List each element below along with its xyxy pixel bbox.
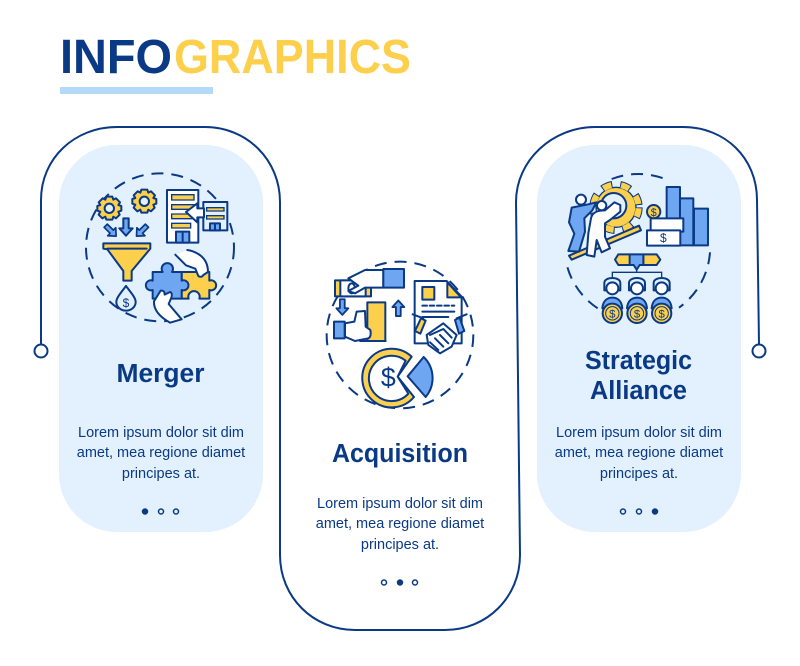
text block: acquisition: Lorem ipsum dolor sit dim xyxy=(317,496,483,512)
text block: merger: amet, mea regione diamet xyxy=(77,445,245,461)
title: GRAPHICS xyxy=(174,31,411,84)
pagination dots: merger xyxy=(142,509,178,514)
pagination dots: acquisition xyxy=(382,580,418,585)
icon: merger xyxy=(86,173,234,323)
text block: merger: principes at. xyxy=(122,466,200,482)
heading: acquisition: Acquisition xyxy=(332,440,468,468)
icon: acquisition xyxy=(327,262,473,408)
text block: acquisition: principes at. xyxy=(361,537,439,553)
icon: acquisition: $ xyxy=(381,363,396,393)
text block: acquisition: amet, mea regione diamet xyxy=(316,516,484,532)
heading: strategic alliance: Alliance xyxy=(590,377,687,405)
heading: merger: Merger xyxy=(116,360,205,388)
title underline xyxy=(60,87,213,94)
connecting outline xyxy=(34,127,766,630)
icon: strategic alliance: $ xyxy=(660,231,667,245)
title xyxy=(60,31,411,84)
pagination dots: strategic alliance xyxy=(620,509,658,514)
icon: merger: $ xyxy=(123,296,130,310)
text block: merger: Lorem ipsum dolor sit dim xyxy=(78,425,244,441)
text block: strategic alliance: Lorem ipsum dolor sit dim xyxy=(556,425,722,441)
heading: strategic alliance: Strategic xyxy=(585,347,692,375)
icon: strategic alliance xyxy=(566,174,710,323)
icon: strategic alliance: $ xyxy=(651,207,657,219)
panel: strategic alliance background xyxy=(537,145,741,532)
heading: strategic alliance xyxy=(585,347,692,405)
panel: merger background xyxy=(59,145,263,532)
text block: strategic alliance: principes at. xyxy=(600,466,678,482)
text block: strategic alliance: amet, mea regione diamet xyxy=(555,445,723,461)
title: INFO xyxy=(60,31,172,84)
